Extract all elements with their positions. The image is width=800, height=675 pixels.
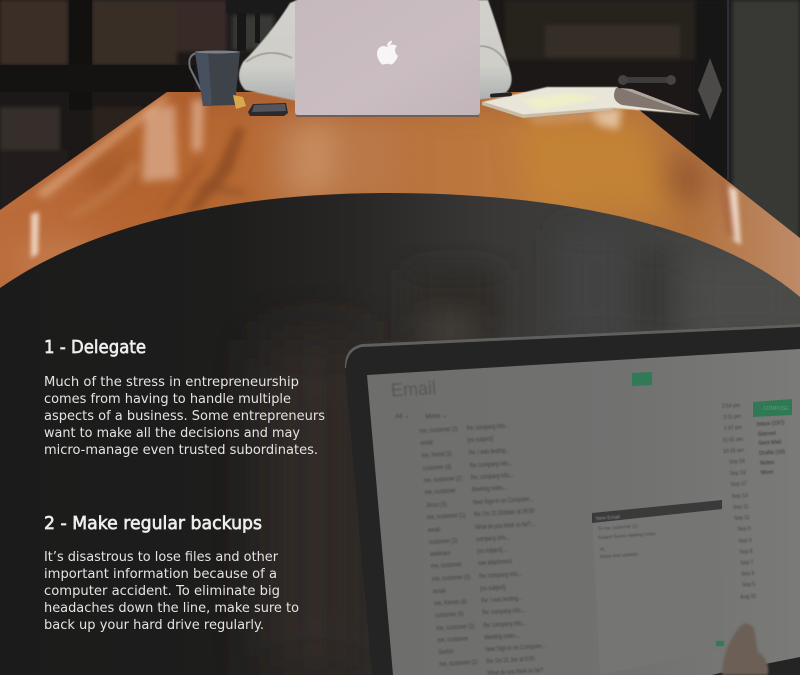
- email subjects: New Sign-in on Computer...: [485, 643, 546, 654]
- heading: 2 - Make regular backups: 2 - Make regular backups: [44, 513, 262, 534]
- email subjects: Re: company info...: [483, 620, 526, 630]
- email subjects: [no subject]: [467, 436, 493, 445]
- dates column: Sep 7: [740, 560, 754, 567]
- compose window: Subject Some meeting notes: [598, 531, 656, 540]
- photo: blurred office behind tablet: [424, 254, 800, 340]
- dates column: Aug 31: [740, 594, 757, 601]
- dates column: Sep 13: [732, 493, 748, 500]
- email subjects: [no subject]: [480, 584, 506, 593]
- sticky note: [233, 95, 246, 109]
- sidebar labels: More: [761, 469, 774, 476]
- email subjects: company info...: [476, 535, 510, 544]
- email sender names: email: [420, 440, 433, 447]
- panel: dark curved content panel: [0, 190, 800, 675]
- sidebar labels: Notes: [760, 460, 775, 467]
- email sender names: me, customer (2): [419, 426, 458, 435]
- photo: finger touching screen: [722, 623, 768, 675]
- dates column: 2:11 pm: [723, 414, 741, 421]
- dates column: Sep 24: [729, 459, 745, 466]
- email sender names: customer (1): [429, 538, 458, 546]
- body text: delegate: aspects of a business. Some entrepreneurs: [44, 408, 325, 424]
- body text: delegate: want to make all the decisions and may: [44, 425, 300, 441]
- icon: door hinge: [698, 58, 722, 120]
- dates column: 2:54 pm: [722, 403, 740, 410]
- email sender names: [419, 426, 478, 668]
- search button: [632, 372, 652, 386]
- email sender names: email: [433, 588, 446, 595]
- body text: backups: It’s disastrous to lose files and other: [44, 549, 278, 565]
- body text: backups: computer accident. To eliminate big: [44, 583, 280, 599]
- body text: backups: important information because of a: [44, 566, 277, 582]
- email subjects: Meeting notes...: [484, 633, 520, 642]
- email subjects: Re: company info...: [466, 423, 510, 433]
- compose window: [592, 500, 722, 558]
- sidebar labels: Starred: [757, 431, 776, 438]
- photo: silver laptop lid: [295, 0, 480, 117]
- sidebar labels: Drafts (19): [759, 449, 786, 457]
- table reflections: [35, 96, 622, 198]
- icon: coffee mug: [189, 50, 246, 109]
- dates column: Sep 11: [734, 515, 750, 522]
- body text: backups: back up your hard drive regularly.: [44, 617, 264, 633]
- email subjects: Re: company info...: [482, 607, 525, 617]
- dates column: 1:47 pm: [724, 425, 742, 432]
- icon: door handle: [618, 75, 676, 85]
- compose window: To me, customer (1): [598, 523, 638, 531]
- text block: tip 2 backups: [44, 513, 299, 633]
- dates column: Sep 11: [733, 504, 749, 511]
- email sender names: customer (4): [435, 611, 464, 619]
- email sender names: email: [428, 527, 440, 534]
- sidebar labels: [756, 420, 786, 474]
- sidebar labels: Inbox (197): [757, 420, 785, 428]
- email app interface: More ⌄: [425, 412, 448, 421]
- dates column: Sep 5: [741, 571, 755, 578]
- email sender names: me, customer (1): [439, 659, 478, 668]
- compose window: Hi,: [600, 547, 606, 552]
- photo: open notebook and pen: [482, 87, 700, 118]
- email sender names: me, customer: [425, 488, 456, 496]
- tablet bezel: [345, 324, 800, 675]
- dates column: Sep 9: [737, 526, 751, 533]
- dates column: Sep 8: [739, 549, 753, 556]
- compose button: [753, 399, 792, 417]
- email sender names: me, customer (2): [436, 623, 475, 632]
- icon: apple logo: [377, 40, 398, 65]
- email sender names: me, friends (4): [434, 599, 467, 607]
- email subjects: Re: company info...: [470, 460, 513, 470]
- email subjects: [no subject]...: [477, 547, 507, 556]
- email sender names: me, customer: [437, 636, 468, 644]
- email subjects: Re: company info...: [471, 472, 514, 482]
- compose window: New Email: [596, 514, 620, 522]
- email subjects: Meeting notes...: [472, 485, 507, 494]
- sidebar labels: Sent Mail: [758, 440, 782, 447]
- icon: smartphone: [248, 103, 288, 116]
- email subjects: Re: I was testing...: [468, 447, 510, 457]
- email sender names: webinars: [429, 550, 451, 558]
- body text: backups: [44, 549, 299, 633]
- email subjects: [466, 422, 548, 675]
- dates column: Sep 5: [742, 582, 756, 589]
- email app interface: All ⌄: [395, 413, 410, 421]
- compose button: COMPOSE: [763, 406, 789, 412]
- text block: tip 1 delegate: [44, 337, 325, 458]
- email subjects: Re: I was testing...: [481, 595, 522, 605]
- email sender names: customer (4): [423, 464, 452, 472]
- wood tone patches: [10, 86, 707, 284]
- dates column: 11:41 am: [722, 437, 743, 444]
- email subjects: Re: On 21 Jun at 9:00: [486, 656, 535, 666]
- body text: backups: headaches down the line, make sure to: [44, 600, 299, 616]
- dark wood grain: [74, 126, 246, 214]
- photo: tablet with email app: [345, 324, 800, 675]
- email sender names: me, customer (3): [432, 574, 471, 583]
- body text: delegate: comes from having to handle multiple: [44, 391, 291, 407]
- email sender names: me, customer (1): [427, 512, 466, 521]
- photo: wooden table: [0, 92, 800, 297]
- email sender names: me, customer: [431, 562, 462, 570]
- email sender names: me, customer (2): [424, 475, 462, 484]
- dates column: Sep 17: [731, 481, 747, 488]
- email sender names: Switch: [438, 649, 454, 656]
- photo: office background: [0, 0, 800, 320]
- email app interface: [392, 380, 786, 675]
- photo: person in white sweater: [239, 0, 512, 101]
- email subjects: Re: company info...: [479, 571, 522, 581]
- heading: 1 - Delegate: 1 - Delegate: [44, 337, 146, 358]
- email app interface: Email: [390, 378, 437, 401]
- email subjects: What do you think so far?...: [475, 521, 536, 532]
- email subjects: see attachment: [478, 559, 512, 568]
- email sender names: me, friend (3): [421, 451, 452, 459]
- dates column: 10:18 am: [723, 448, 744, 455]
- compose window: Notes and updates: [600, 551, 639, 559]
- body text: delegate: micro-manage even trusted subordinates.: [44, 442, 318, 458]
- body text: delegate: [44, 374, 325, 458]
- green send button: [716, 641, 724, 646]
- tablet screen: [367, 349, 800, 675]
- dates column: Sep 9: [738, 538, 752, 545]
- body text: delegate: Much of the stress in entrepreneurship: [44, 374, 299, 390]
- email subjects: Re: On 21 October at 09:00: [474, 508, 535, 519]
- email sender names: Jesus (3): [426, 501, 447, 509]
- dates column: Sep 24: [730, 470, 746, 477]
- dates column: [722, 403, 756, 600]
- email subjects: New Sign-in on Computer...: [473, 496, 534, 507]
